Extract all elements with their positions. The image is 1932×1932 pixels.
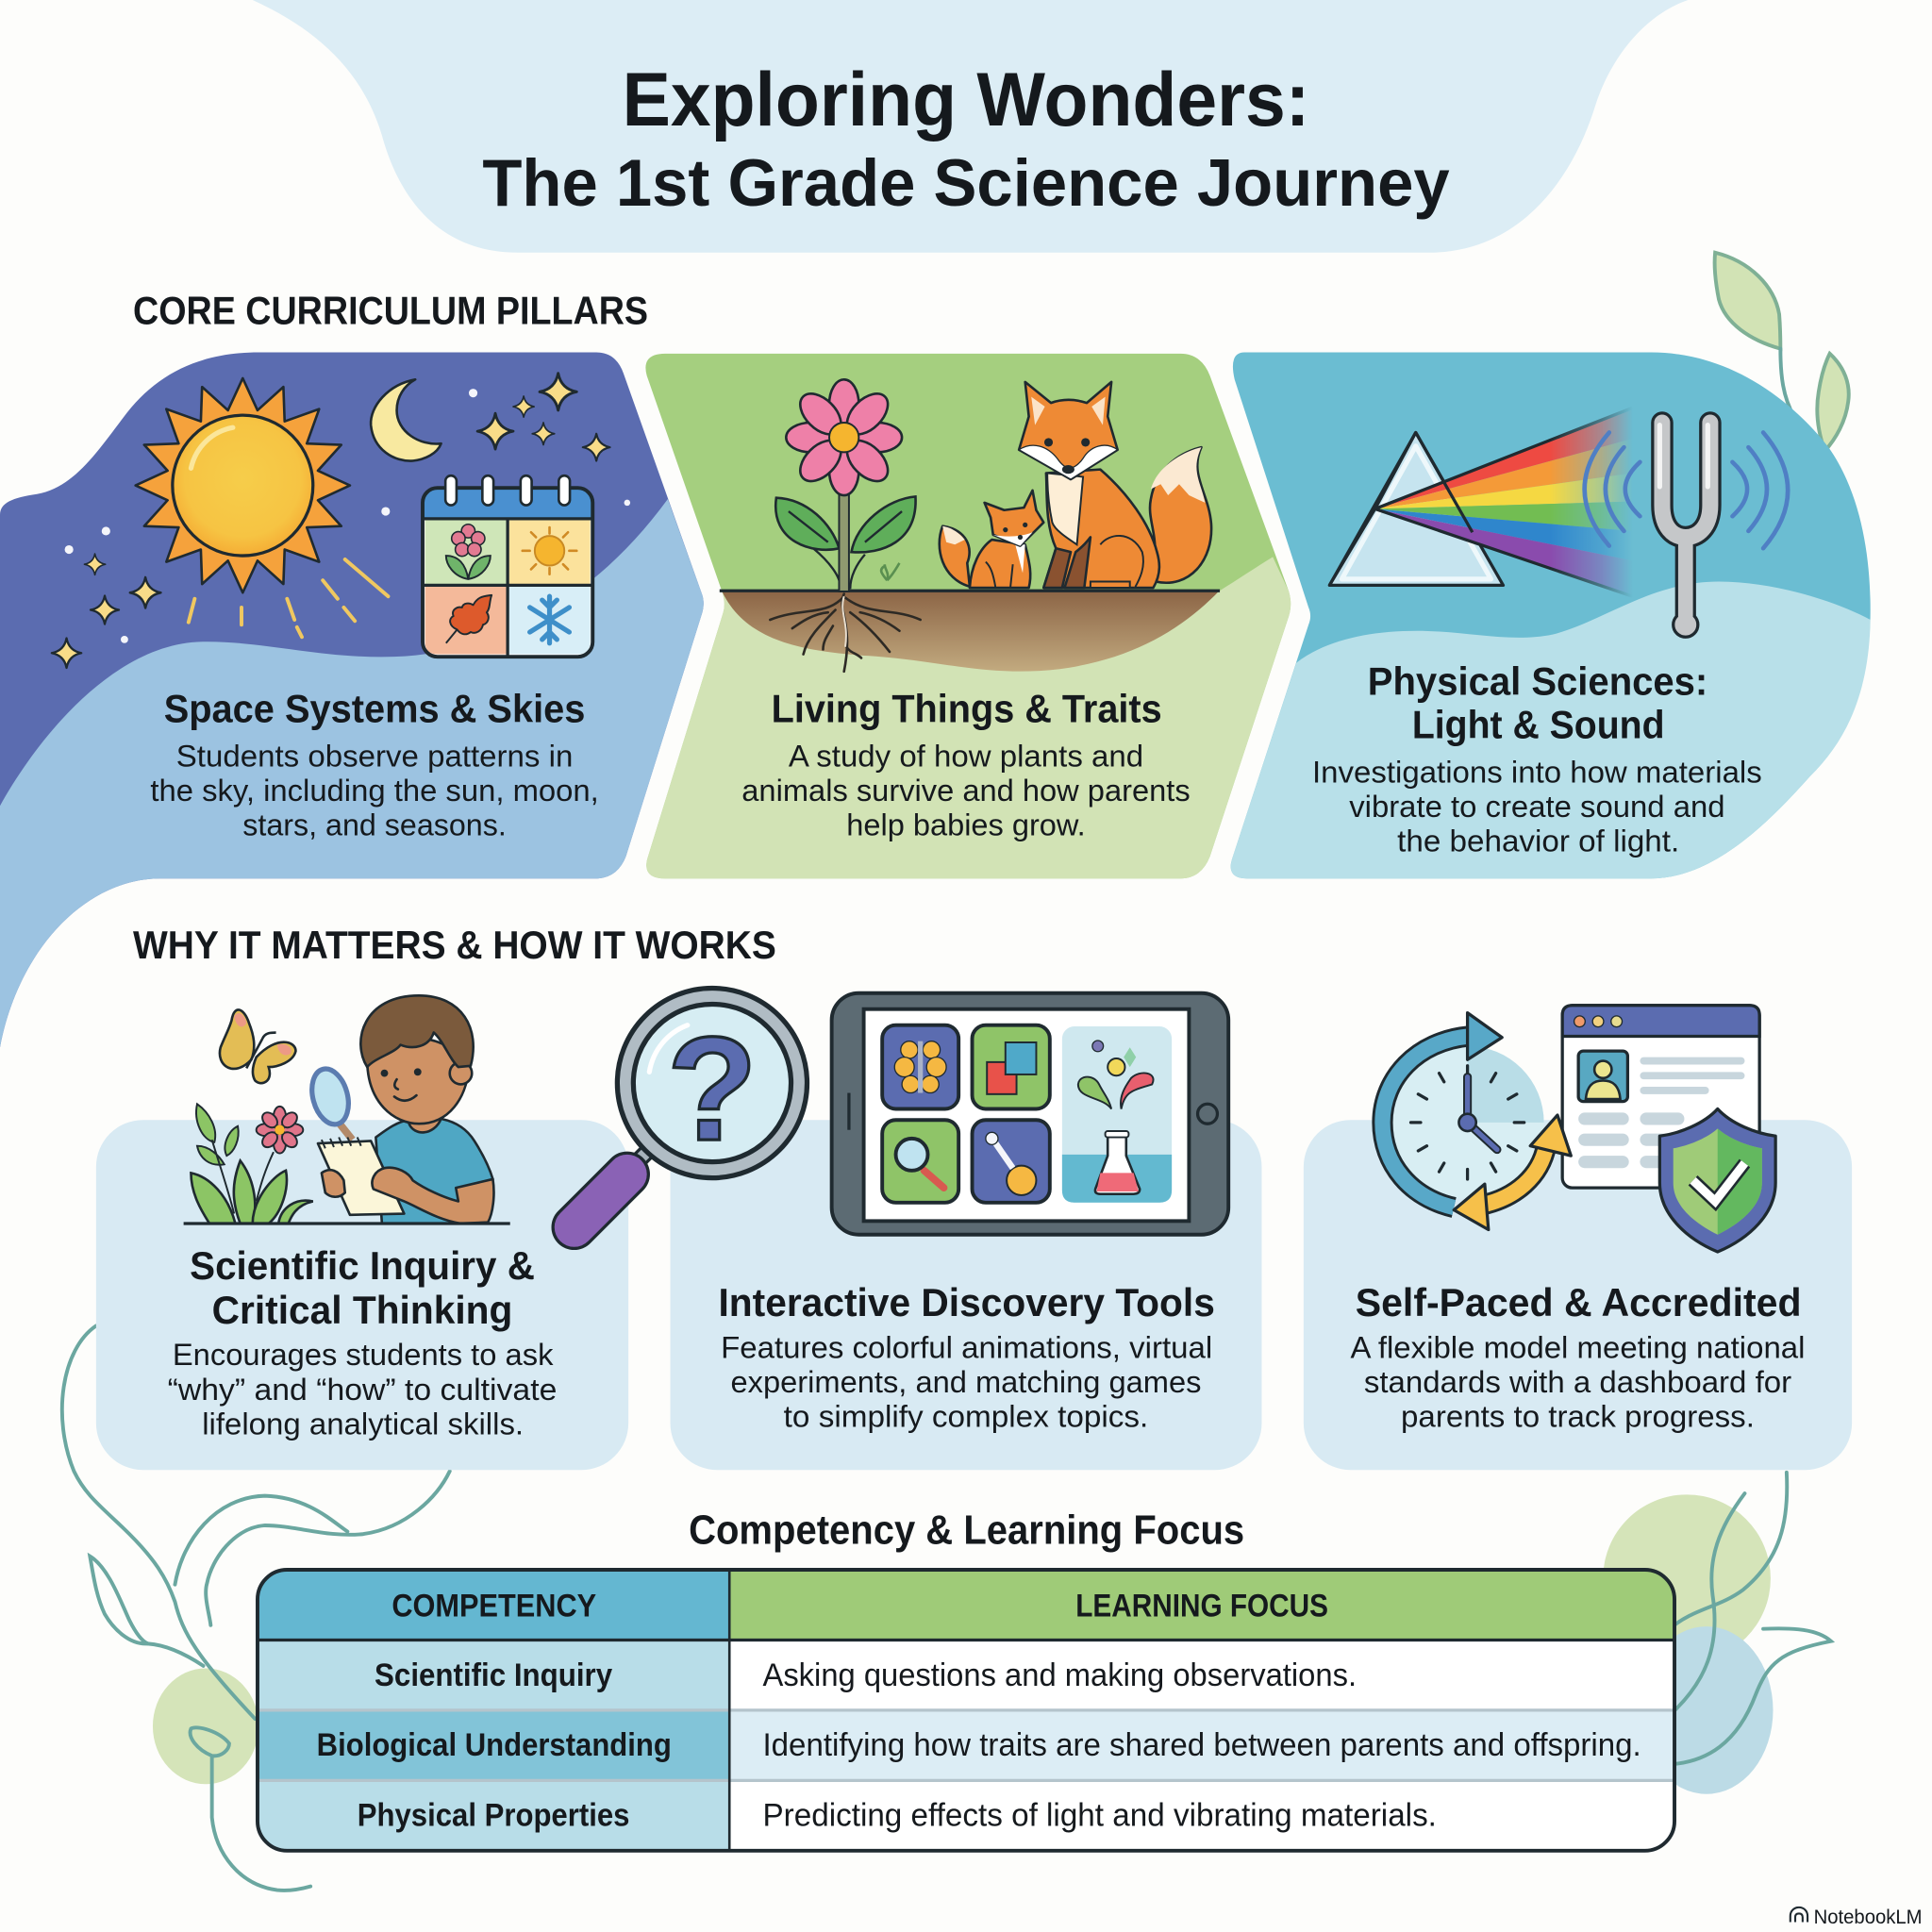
shirt [375,1118,492,1224]
icon: sun [136,378,350,592]
icon: baby fox [940,491,1043,588]
icon: spring flower [446,525,491,579]
panel: physical sciences [1231,353,1871,878]
magnifier small [338,1122,353,1140]
text: physical sciences: vibrate to create sound and [1349,789,1725,824]
text: physical sciences: Investigations into how materials [1312,754,1762,789]
text: interactive tools: experiments, and matching games [731,1364,1201,1399]
table row: scientific inquiry: Asking questions and making observations. [762,1657,1357,1693]
text: living things [741,686,1191,842]
icon: adult fox [1019,382,1211,588]
text: living things: A study of how plants and [789,738,1143,773]
text: interactive tools: to simplify complex topics. [784,1398,1148,1433]
icon: clock [1391,1046,1544,1199]
panel: living things [645,354,1291,878]
icon: autumn leaf [446,595,491,643]
hair [360,995,474,1067]
neck [409,1107,441,1132]
text: interactive tools: Features colorful animations, virtual [721,1329,1212,1364]
text: living things: Living Things & Traits [772,686,1162,730]
table row: scientific inquiry: Scientific Inquiry [375,1657,612,1693]
table row: physical properties: Predicting effects of light and vibrating materials. [762,1798,1437,1834]
table row: biological understanding [317,1727,1641,1763]
icon: sound waves [1585,432,1788,548]
text: physical sciences: Physical Sciences: [1368,659,1707,704]
icon: magnifying glass: ? [667,1007,758,1172]
notepad [318,1141,404,1215]
table row: physical properties: Physical Properties [358,1798,629,1834]
face [367,1038,468,1124]
icon: prism [1329,432,1503,585]
app icon: magnifier [882,1120,958,1203]
header background blob [253,0,1688,253]
text: self-paced: A flexible model meeting national [1351,1329,1805,1364]
app icon: pendulum [973,1120,1050,1203]
title: The 1st Grade Science Journey [482,145,1450,220]
panel: space systems [0,353,704,1047]
heading: why it matters: WHY IT MATTERS & HOW IT WORKS [133,923,776,967]
text: physical sciences [1312,659,1762,858]
icon: rainbow [1375,408,1633,596]
text: scientific inquiry: Critical Thinking [212,1288,512,1332]
plant [191,1104,313,1224]
sun rays [189,559,388,637]
text: scientific inquiry: Encourages students to ask [173,1337,554,1372]
text: physical sciences: the behavior of light. [1397,824,1679,858]
watermark: NotebookLM: NotebookLM [1814,1907,1923,1928]
decoration: bottom right vines [1603,1473,1831,1794]
icon: seasons calendar [423,475,592,657]
icon: browser dashboard [1562,1006,1759,1188]
text: living things: animals survive and how parents [741,773,1191,808]
icon: magnifying glass [575,989,808,1227]
decoration: bottom left vines [62,1325,450,1890]
text: space systems: Space Systems & Skies [164,686,585,730]
arm and hands [372,1168,493,1224]
icon: summer sun [523,527,576,575]
text: scientific inquiry: “why” and “how” to cultivate [168,1372,557,1407]
text: self-paced [1351,1280,1805,1433]
text: self-paced: parents to track progress. [1401,1398,1755,1433]
app icon: brain [882,1025,958,1109]
app icon: shapes [973,1025,1050,1109]
table row: biological understanding: Identifying how traits are shared between parents and offspring. [762,1727,1641,1763]
icon: stars [52,374,630,668]
text: physical sciences: Light & Sound [1412,702,1665,746]
text: space systems: Students observe patterns in [176,738,573,773]
text: self-paced: standards with a dashboard for [1364,1364,1791,1399]
table header row [391,1589,1328,1624]
icon: moon [371,379,441,461]
app panel: flask [1062,1026,1172,1203]
icon: tablet [832,993,1228,1235]
text: scientific inquiry [168,1243,557,1441]
table: competency and learning focus [258,1570,1674,1851]
icon: tuning fork [1659,423,1710,637]
text: interactive tools [718,1280,1215,1433]
card: self-paced [1304,1006,1852,1470]
table row: biological understanding: Biological Understanding [317,1727,672,1763]
heading: core curriculum pillars: CORE CURRICULUM PILLARS [133,289,648,333]
icon: yellow cycle arrow [1454,1115,1571,1230]
icon: child observing [184,995,510,1224]
butterfly [220,1009,295,1083]
table header row: COMPETENCY [391,1589,596,1624]
card: interactive tools [671,1120,1261,1470]
text: space systems [150,686,599,842]
text: self-paced: Self-Paced & Accredited [1356,1280,1802,1324]
text: space systems: stars, and seasons. [242,808,507,842]
decoration: top right leaves [1715,253,1849,451]
table row: scientific inquiry [375,1657,1357,1693]
text: scientific inquiry: Scientific Inquiry & [190,1243,535,1288]
icon: shield check [1659,1109,1775,1252]
icon: flower with roots [770,379,921,672]
soil [722,591,1219,672]
text: interactive tools: Interactive Discovery Tools [718,1280,1215,1324]
title: Exploring Wonders: [623,58,1309,142]
card: scientific inquiry [96,995,628,1470]
icon: blue cycle arrow [1382,1013,1502,1208]
text: space systems: the sky, including the sun, moon, [150,773,599,808]
text: scientific inquiry: lifelong analytical skills. [202,1406,524,1441]
text: living things: help babies grow. [846,808,1086,842]
title [482,58,1450,220]
icon: snowflake [530,596,569,643]
heading: competency & learning focus: Competency & Learning Focus [689,1508,1244,1554]
table header row: LEARNING FOCUS [1075,1589,1328,1624]
table row: physical properties [358,1798,1437,1834]
